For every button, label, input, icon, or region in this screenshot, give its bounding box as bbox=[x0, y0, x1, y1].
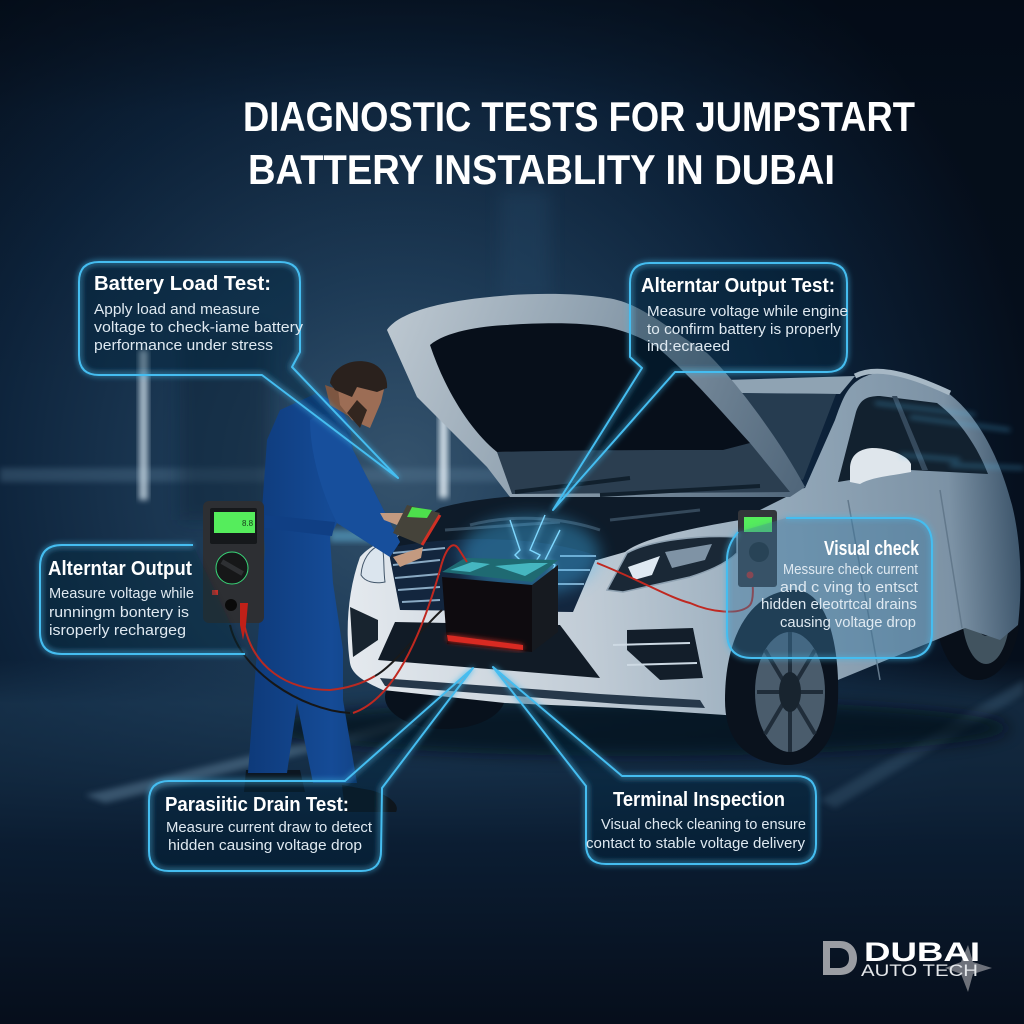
text: Alternator Output Test description bbox=[647, 303, 848, 355]
multimeter: left bbox=[203, 501, 264, 640]
panel: Alternator Output bbox=[40, 545, 245, 654]
text: Battery Load Test description bbox=[94, 301, 304, 354]
heading: Alternator Output Test: Alterntar Output Test: bbox=[641, 274, 835, 297]
text: Alternator Output description: Measure voltage while bbox=[49, 585, 194, 602]
text: Parasitic Drain Test description: Measure current draw to detect bbox=[166, 819, 373, 836]
hood inner band bbox=[497, 443, 790, 494]
multimeter: left: 8.8 bbox=[242, 519, 254, 528]
car body bbox=[348, 372, 1020, 716]
text: Alternator Output description: runningm bontery is bbox=[49, 604, 189, 621]
wipers bbox=[515, 478, 760, 495]
engine bay bbox=[385, 492, 790, 560]
right intake bbox=[627, 628, 703, 680]
belt bbox=[265, 515, 335, 536]
text: Visual check description: and c ving to entsct bbox=[780, 579, 919, 596]
arm bbox=[310, 414, 400, 557]
suit body bbox=[248, 393, 400, 783]
bumper slot bbox=[380, 678, 705, 708]
title: BATTERY INSTABLITY IN DUBAI bbox=[248, 146, 835, 193]
logo: Dubai Auto Tech: AUTO TECH bbox=[861, 961, 978, 980]
test leads bbox=[230, 545, 753, 713]
hair bbox=[330, 361, 387, 397]
panel: Visual check bbox=[727, 518, 932, 658]
panel: Terminal Inspection bbox=[493, 667, 816, 864]
text: Alternator Output description: isroperly rechargeg bbox=[49, 622, 186, 639]
text: Terminal Inspection description: contact to stable voltage delivery bbox=[586, 835, 806, 852]
panel: Battery Load Test bbox=[79, 262, 398, 478]
logo: Dubai Auto Tech bbox=[823, 937, 992, 992]
center lower intake bbox=[378, 622, 600, 678]
text: Battery Load Test description: performance under stress bbox=[94, 337, 273, 354]
text: Visual check description bbox=[761, 561, 919, 631]
head bbox=[337, 369, 385, 428]
heading: Parasitic Drain Test: Parasiitic Drain Test: bbox=[165, 793, 349, 816]
text: Visual check description: hidden eleotrtcal drains bbox=[761, 596, 917, 613]
headlight right bbox=[607, 537, 737, 592]
multimeter: handheld bbox=[393, 505, 440, 545]
roof rail bbox=[855, 371, 950, 393]
heading: Alternator Output: Alterntar Output bbox=[48, 557, 192, 580]
multimeter: right bbox=[738, 510, 777, 587]
mechanic bbox=[244, 361, 423, 812]
logo: Dubai Auto Tech: DUBAI bbox=[864, 937, 980, 967]
icon: star bbox=[945, 945, 992, 992]
text: Visual check description: causing voltage drop bbox=[780, 614, 916, 631]
text: Alternator Output Test description: ind:ecraeed bbox=[647, 338, 730, 355]
engine electricity glow bbox=[460, 515, 600, 595]
beard bbox=[347, 400, 367, 428]
text: Parasitic Drain Test description bbox=[166, 819, 373, 854]
front lower wheel bbox=[385, 665, 505, 729]
heading: Terminal Inspection: Terminal Inspection bbox=[613, 788, 785, 811]
illustration: SUV with open hood bbox=[348, 294, 1024, 765]
heading: Visual check: Visual check bbox=[824, 537, 919, 560]
grille bbox=[388, 539, 597, 612]
hands bbox=[380, 513, 423, 567]
front wheel bbox=[725, 590, 838, 765]
mirror bbox=[850, 448, 911, 484]
text: Parasitic Drain Test description: hidden causing voltage drop bbox=[168, 837, 362, 854]
neck bbox=[325, 385, 352, 418]
headlight left bbox=[361, 545, 385, 583]
text: Alternator Output Test description: Measure voltage while engine bbox=[647, 303, 848, 320]
windshield bbox=[700, 393, 836, 480]
text: Battery Load Test description: voltage to check-iame battery bbox=[94, 319, 304, 336]
hood open bbox=[387, 294, 805, 497]
text: Alternator Output Test description: to confirm battery is properly bbox=[647, 321, 841, 338]
icon: D mark bbox=[823, 941, 857, 975]
text: Visual check description: Messure check current bbox=[783, 561, 919, 578]
panel: Parasitic Drain Test bbox=[149, 668, 473, 871]
boots bbox=[342, 785, 397, 812]
side windows bbox=[838, 396, 988, 482]
left intake bbox=[350, 607, 378, 657]
speed streaks bbox=[875, 403, 1024, 468]
text: Terminal Inspection description bbox=[586, 816, 806, 852]
text: Battery Load Test description: Apply load and measure bbox=[94, 301, 260, 318]
rear wheel bbox=[936, 544, 1020, 680]
door lines bbox=[848, 490, 962, 680]
hood underside bbox=[430, 323, 750, 452]
heading: Battery Load Test: Battery Load Test: bbox=[94, 272, 271, 295]
title bbox=[243, 93, 915, 193]
text: Terminal Inspection description: Visual check cleaning to ensure bbox=[601, 816, 806, 833]
panel: Alternator Output Test bbox=[553, 263, 848, 510]
battery bbox=[442, 558, 558, 652]
text: Alternator Output description bbox=[49, 585, 194, 639]
engine details bbox=[445, 510, 700, 530]
roof bbox=[725, 376, 855, 394]
title: DIAGNOSTIC TESTS FOR JUMPSTART bbox=[243, 93, 915, 140]
